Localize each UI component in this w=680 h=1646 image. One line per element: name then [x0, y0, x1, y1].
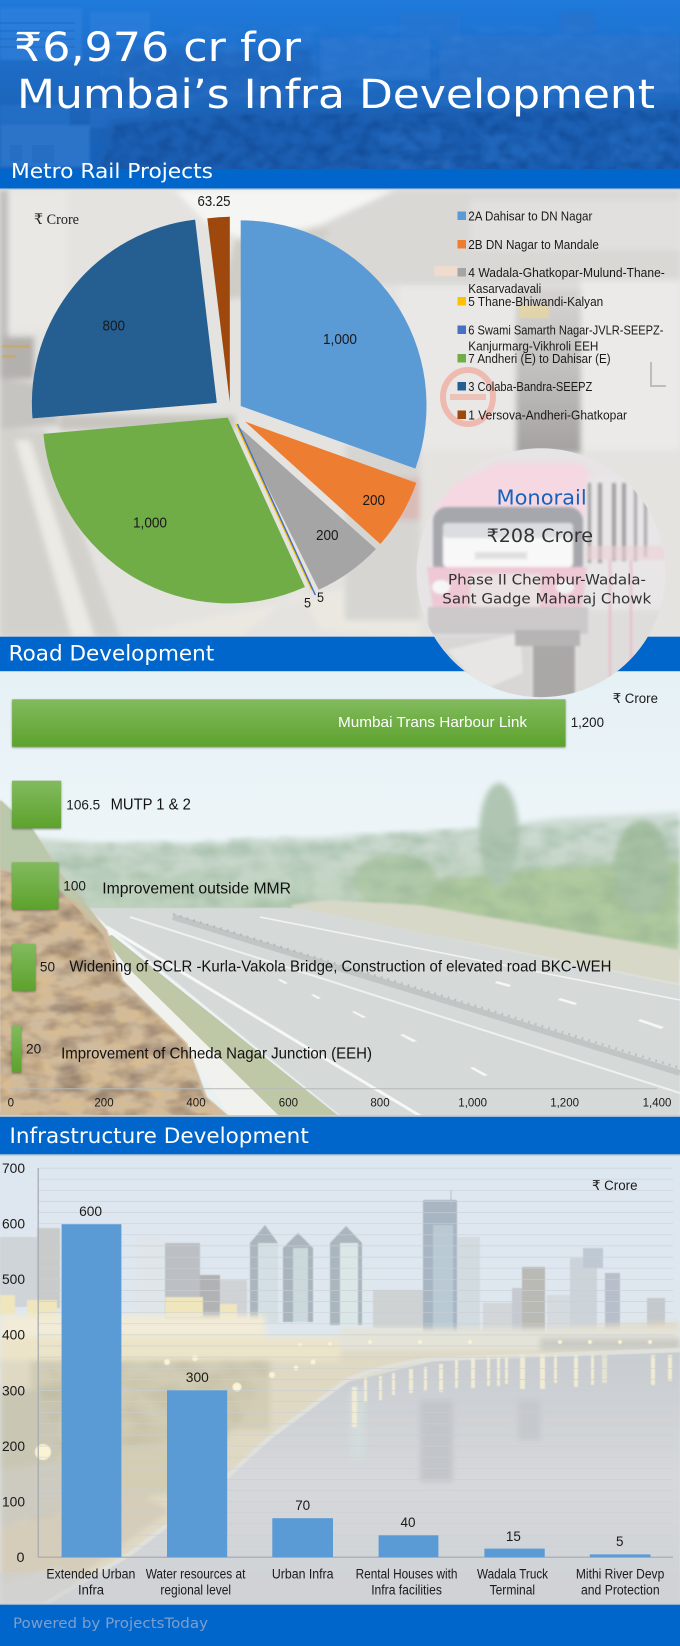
bar: Improvement of Chheda Nagar Junction	[12, 1025, 372, 1072]
bar: Mumbai Trans Harbour Link: Mumbai Trans Harbour Link	[338, 714, 528, 731]
pie legend: 1 Versova-Andheri-Ghatkopar	[468, 408, 628, 422]
bar chart axes	[38, 1168, 673, 1557]
road chart axis	[8, 1089, 671, 1110]
bar: Water resources: regional level	[160, 1582, 231, 1598]
bar: Extended Urban Infra	[46, 1203, 135, 1598]
bar: Mumbai Trans Harbour Link	[12, 699, 604, 747]
title	[14, 25, 655, 118]
panel: infrastructure development	[0, 1156, 680, 1605]
bar: Extended Urban Infra: Extended Urban	[46, 1566, 135, 1581]
callout: monorail	[416, 448, 667, 702]
bar: Improvement outside MMR: Improvement outside MMR	[102, 880, 291, 897]
pie slice: 7 Andheri to Dahisar	[43, 418, 305, 603]
pie slice: 4 Wadala-Ghatkopar	[236, 424, 376, 590]
bar: Mithi River	[576, 1533, 664, 1598]
road chart axis: 200	[94, 1098, 114, 1110]
pie legend: Kasarvadavali	[468, 281, 541, 296]
y axis labels: 200	[2, 1438, 25, 1454]
y axis labels	[2, 1160, 25, 1565]
bar: Improvement outside MMR	[12, 862, 291, 909]
pie legend: 2A Dahisar to DN Nagar	[468, 208, 593, 224]
bar: Improvement outside MMR: 100	[63, 878, 86, 894]
road background photo	[0, 672, 680, 1117]
bar: Water resources: 300	[186, 1369, 209, 1385]
pie value labels	[102, 193, 385, 610]
bar: Improvement of Chheda Nagar Junction: Improvement of Chheda Nagar Junction (EEH)	[61, 1045, 372, 1062]
bar: MUTP 1 & 2: 106.5	[66, 796, 100, 812]
pie slice: 3 Colaba-Bandra-SEEPZ	[32, 220, 217, 418]
metro background photo	[0, 190, 680, 637]
road chart axis: 800	[370, 1098, 390, 1110]
pie legend: 3 Colaba-Bandra-SEEPZ	[468, 379, 592, 394]
footer: Powered by ProjectsToday	[13, 1616, 208, 1632]
bar: Extended Urban Infra: 600	[79, 1203, 102, 1219]
pie slice: 2A Dahisar to DN Nagar	[241, 220, 427, 469]
bar: Rental Houses: Rental Houses with	[356, 1566, 458, 1581]
bar: Wadala Truck Terminal: 15	[506, 1528, 521, 1544]
unit label: crore: ₹ Crore	[34, 212, 79, 228]
road chart axis: 1,400	[643, 1098, 671, 1110]
y axis labels: 100	[2, 1494, 25, 1510]
pie value labels: 200	[316, 527, 338, 544]
pie chart	[32, 193, 427, 610]
road chart axis: 400	[186, 1098, 206, 1110]
pie slice: 2B DN Nagar to Mandale	[245, 422, 416, 544]
bar: Wadala Truck Terminal	[477, 1528, 548, 1598]
pie value labels: 800	[102, 318, 125, 334]
unit label: crore: ₹ Crore	[613, 691, 658, 706]
heading band: infrastructure development	[0, 1115, 680, 1156]
bar: Urban Infra	[272, 1497, 334, 1581]
monorail description	[442, 572, 652, 607]
pie slice: 5 Thane-Bhiwandi-Kalyan	[236, 424, 312, 590]
pie legend: 5 Thane-Bhiwandi-Kalyan	[468, 294, 603, 309]
pie legend: Kanjurmarg-Vikhroli EEH	[468, 338, 598, 354]
monorail amount: ₹208 Crore	[487, 526, 593, 547]
heading band: road development: Road Development	[9, 642, 214, 666]
pie value labels: 1,000	[133, 514, 167, 532]
y axis labels: 0	[16, 1549, 25, 1565]
bar: Water resources: Water resources at	[146, 1566, 246, 1581]
pie legend: 4 Wadala-Ghatkopar-Mulund-Thane-	[468, 265, 665, 280]
road chart axis: 1,000	[458, 1098, 487, 1110]
y axis labels: 500	[2, 1271, 25, 1287]
bar: Urban Infra: Urban Infra	[272, 1566, 334, 1581]
monorail photo circle	[416, 448, 667, 702]
panel: road development	[0, 672, 680, 1117]
monorail description: Phase II Chembur-Wadala-	[448, 572, 646, 588]
road chart axis: 0	[8, 1098, 14, 1110]
pie legend: 7 Andheri (E) to Dahisar (E)	[468, 351, 611, 366]
bar: Widening of SCLR: 50	[40, 959, 55, 975]
pie slice: 1 Versova-Andheri-Ghatkopar	[207, 217, 230, 402]
bar: Wadala Truck Terminal: Wadala Truck	[477, 1566, 548, 1581]
y axis labels: 700	[2, 1160, 25, 1176]
y axis labels: 300	[2, 1382, 25, 1398]
bar: Mithi River: and Protection	[581, 1582, 660, 1598]
road chart axis: 1,200	[550, 1098, 579, 1110]
heading: metro rail projects: Metro Rail Projects	[11, 159, 213, 183]
heading band: road development	[0, 637, 680, 673]
heading band: infrastructure development: Infrastructure Development	[10, 1124, 309, 1149]
pie value labels: 5	[317, 589, 324, 605]
y axis labels: 400	[2, 1327, 25, 1343]
pie value labels: 63.25	[198, 193, 230, 210]
bar: Improvement of Chheda Nagar Junction: 20	[26, 1040, 41, 1056]
bar: Extended Urban Infra: Infra	[78, 1582, 104, 1598]
pie value labels: 200	[362, 492, 385, 509]
monorail heading: Monorail	[496, 486, 587, 510]
header banner	[0, 0, 680, 189]
pie value labels: 1,000	[323, 331, 357, 348]
monorail description: Sant Gadge Maharaj Chowk	[442, 591, 652, 607]
unit label: crore: ₹ Crore	[592, 1178, 638, 1193]
pie value labels: 5	[304, 594, 311, 610]
bar: Rental Houses: 40	[400, 1514, 416, 1530]
y axis labels: 600	[2, 1216, 25, 1232]
bar: Widening of SCLR: Widening of SCLR -Kurla-Vakola Bridge, Construction of elevated road BKC-WEH	[69, 959, 611, 976]
bar: Urban Infra: 70	[295, 1497, 310, 1513]
gridlines	[38, 1168, 673, 1546]
title: ₹6,976 cr for	[14, 25, 302, 71]
bar: Water resources	[146, 1369, 246, 1598]
bar: Wadala Truck Terminal: Terminal	[490, 1582, 535, 1598]
bar: Mithi River: Mithi River Devp	[576, 1566, 664, 1581]
bar: Widening of SCLR	[12, 944, 611, 991]
panel: metro rail	[0, 190, 680, 637]
bar: Rental Houses: Infra facilities	[371, 1582, 442, 1598]
bar: Mumbai Trans Harbour Link: 1,200	[571, 714, 604, 730]
footer	[0, 1603, 680, 1646]
bar: Rental Houses	[356, 1514, 458, 1598]
bar: MUTP 1 & 2: MUTP 1 & 2	[111, 797, 191, 814]
title: Mumbai’s Infra Development	[17, 72, 655, 118]
pie legend: 2B DN Nagar to Mandale	[468, 237, 599, 252]
skyline background photo	[0, 1156, 680, 1605]
road chart axis: 600	[279, 1098, 298, 1110]
bar: Mithi River: 5	[616, 1533, 624, 1549]
bar: MUTP 1 & 2	[12, 781, 191, 828]
pie slice: 6 Swami Samarth Nagar	[238, 424, 315, 595]
pie legend	[458, 208, 665, 422]
